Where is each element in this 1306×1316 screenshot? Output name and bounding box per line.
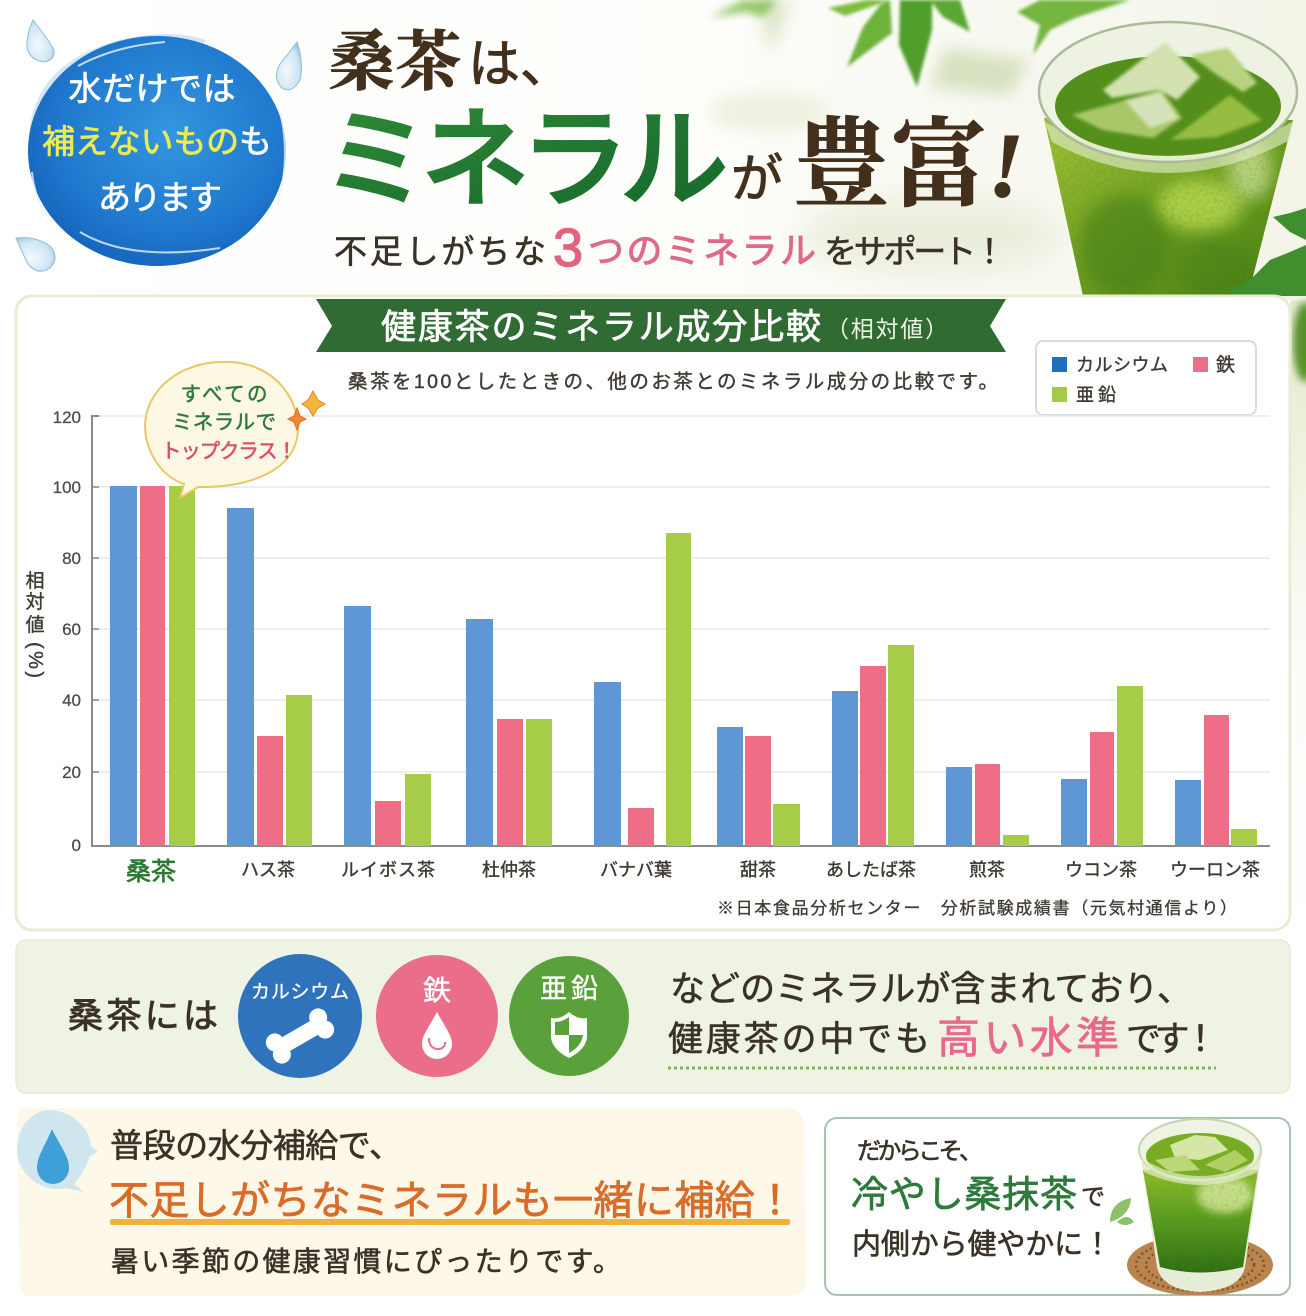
heading line 3: 不足しがちな <box>334 233 546 270</box>
y axis title: 値 <box>25 614 45 636</box>
bar chart <box>24 408 1270 886</box>
chart title ribbon: （相対値） <box>826 316 948 342</box>
y axis title: (%) <box>24 642 46 678</box>
y axis labels: 0 <box>72 836 81 855</box>
heading line 3: をサポート！ <box>824 233 1006 270</box>
y axis title: 相 <box>25 570 45 592</box>
chart legend: カルシウム <box>1076 355 1168 375</box>
iron bars <box>140 486 1229 846</box>
zinc bars <box>169 486 1257 846</box>
iced green tea glass <box>1038 21 1300 300</box>
y axis labels: 40 <box>62 691 81 710</box>
chart title ribbon <box>316 299 1006 352</box>
mint leaves <box>1227 208 1306 296</box>
panel: cold mulberry matcha <box>825 1118 1290 1296</box>
category labels: ハス茶 <box>241 860 295 880</box>
water circle badge <box>28 36 286 266</box>
source note: ※日本食品分析センター 分析試験成績書（元気村通信より） <box>717 899 1237 918</box>
hydration text: 暑い季節の健康習慣にぴったりです。 <box>111 1246 621 1277</box>
heading line 1: 桑茶 <box>329 27 461 99</box>
heading line 1 <box>329 27 572 99</box>
heading line 2 <box>322 99 1024 220</box>
icon: calcium <box>238 954 362 1078</box>
badge text: 水だけでは <box>68 70 236 107</box>
heading line 3: 3 <box>553 218 583 278</box>
small glass of tea <box>1139 1119 1265 1292</box>
summary lead text: 桑茶には <box>68 997 218 1036</box>
hydration text: 不足しがちなミネラルも一緒に補給！ <box>109 1179 795 1223</box>
chart legend: 亜鉛 <box>1076 385 1116 405</box>
heading line 2: ! <box>988 114 1024 216</box>
chart legend <box>1036 341 1256 415</box>
ice cubes <box>1072 42 1262 140</box>
header background with blurred leaves <box>0 0 1306 940</box>
category labels: 煎茶 <box>969 860 1005 880</box>
summary text: です！ <box>1126 1020 1218 1059</box>
icon: iron: 鉄 <box>423 975 451 1006</box>
y axis title: 対 <box>25 591 45 613</box>
y axis labels: 100 <box>53 478 81 497</box>
cold tea text: 内側から健やかに！ <box>852 1228 1112 1261</box>
summary text: などのミネラルが含まれており、 <box>670 970 1192 1009</box>
callout: top class: すべての <box>180 383 268 406</box>
callout: top class: ミネラルで <box>172 411 276 434</box>
heading line 3: つのミネラル <box>588 230 816 271</box>
chart subtitle: 桑茶を100としたときの、他のお茶とのミネラル成分の比較です。 <box>348 371 998 393</box>
panel: minerals summary <box>16 940 1290 1093</box>
category labels: バナバ葉 <box>600 860 672 880</box>
summary text: 高い水準 <box>937 1015 1119 1063</box>
cold tea text: だからこそ、 <box>857 1138 983 1165</box>
badge text: 補えないものも <box>42 123 272 160</box>
icon: tea leaf <box>1110 1198 1134 1225</box>
calcium bars <box>110 486 1201 846</box>
summary text <box>668 970 1218 1063</box>
icon: iron <box>376 955 498 1077</box>
cold tea text: で <box>1081 1184 1105 1211</box>
heading line 1: 、 <box>520 36 572 94</box>
category labels: ウコン茶 <box>1065 860 1137 880</box>
icon: water drop bubble <box>17 1110 98 1192</box>
y axis labels <box>53 408 81 855</box>
y axis labels: 20 <box>62 763 81 782</box>
chart title ribbon: 健康茶のミネラル成分比較 <box>381 308 821 347</box>
badge text: あります <box>98 179 222 216</box>
category labels: 杜仲茶 <box>482 860 536 880</box>
icon: zinc <box>509 956 629 1076</box>
category labels: ルイボス茶 <box>341 860 435 880</box>
category labels <box>126 858 1260 886</box>
cold tea text: 冷やし桑抹茶 <box>851 1174 1077 1215</box>
y axis labels: 80 <box>62 549 81 568</box>
category labels: 甜茶 <box>740 860 776 880</box>
icon: sparkles <box>288 391 325 430</box>
y axis labels: 120 <box>53 408 81 427</box>
category labels: 桑茶 <box>126 858 176 886</box>
category labels: あしたば茶 <box>826 860 916 880</box>
callout: top class <box>145 362 298 498</box>
summary text: 健康茶の中でも <box>668 1020 930 1059</box>
badge text <box>42 70 272 216</box>
icon: zinc: 亜鉛 <box>540 974 598 1004</box>
hydration text: 普段の水分補給で、 <box>110 1127 402 1164</box>
heading line 1: は <box>468 36 520 94</box>
panel: daily hydration <box>17 1108 806 1296</box>
heading line 2: が <box>731 151 783 209</box>
coaster <box>1127 1241 1273 1295</box>
icon: calcium: カルシウム <box>251 982 349 1003</box>
callout: top class: トップクラス！ <box>161 440 297 463</box>
panel: mineral comparison chart <box>16 296 1290 930</box>
cold tea text <box>851 1138 1112 1261</box>
water droplets <box>16 20 301 271</box>
heading line 2: ミネラル <box>322 99 728 220</box>
heading line 3 <box>334 218 1006 278</box>
chart legend: 鉄 <box>1216 354 1235 376</box>
y axis title <box>24 570 46 678</box>
hydration text <box>109 1127 795 1277</box>
heading line 2: 豊富 <box>793 112 987 219</box>
y axis labels: 60 <box>62 620 81 639</box>
category labels: ウーロン茶 <box>1170 860 1260 880</box>
